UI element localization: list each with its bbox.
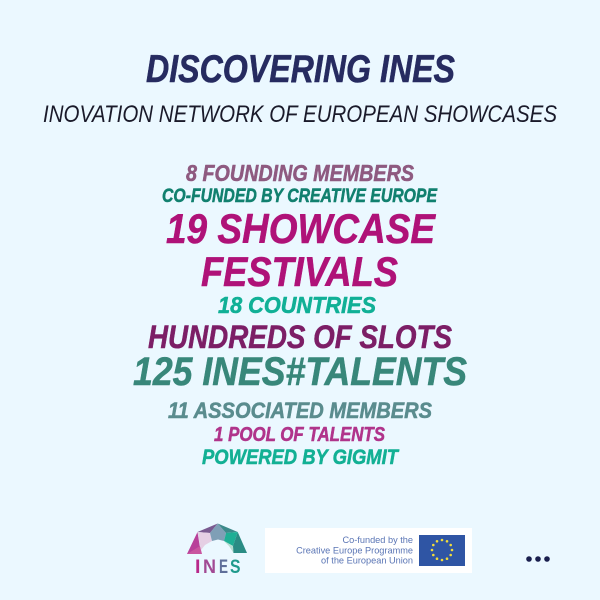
badge text: Creative Europe Programme [296, 545, 413, 555]
logo wordmark: S [230, 556, 240, 578]
stat: founding members: 8 FOUNDING MEMBERS [186, 160, 415, 186]
stat: showcase festivals: 19 SHOWCASE [166, 205, 437, 252]
badge text: of the European Union [321, 556, 413, 566]
stat: showcase festivals [166, 205, 437, 295]
logo wordmark [195, 556, 240, 578]
badge text [296, 535, 413, 566]
icon: arch [187, 524, 247, 554]
stat: associated members: 11 ASSOCIATED MEMBERS [168, 398, 432, 423]
stat: co-funded: CO-FUNDED BY CREATIVE EUROPE [162, 185, 438, 207]
logo wordmark: E [219, 556, 228, 578]
stat: gigmit: POWERED BY GIGMIT [202, 445, 400, 469]
stat: countries: 18 COUNTRIES [218, 292, 377, 318]
INES logo [187, 524, 247, 578]
EU co-funding badge [265, 528, 472, 573]
stat: slots: HUNDREDS OF SLOTS [148, 319, 452, 355]
icon: EU flag [419, 535, 465, 566]
badge text: Co-funded by the [342, 535, 413, 545]
stat: pool of talents: 1 POOL OF TALENTS [214, 424, 386, 446]
stat: showcase festivals: FESTIVALS [201, 248, 398, 295]
icon: more dots [526, 556, 550, 562]
title: DISCOVERING INES [146, 48, 455, 91]
logo wordmark: N [203, 556, 216, 578]
logo wordmark: I [195, 556, 200, 578]
stat: talents: 125 INES#TALENTS [133, 350, 467, 394]
